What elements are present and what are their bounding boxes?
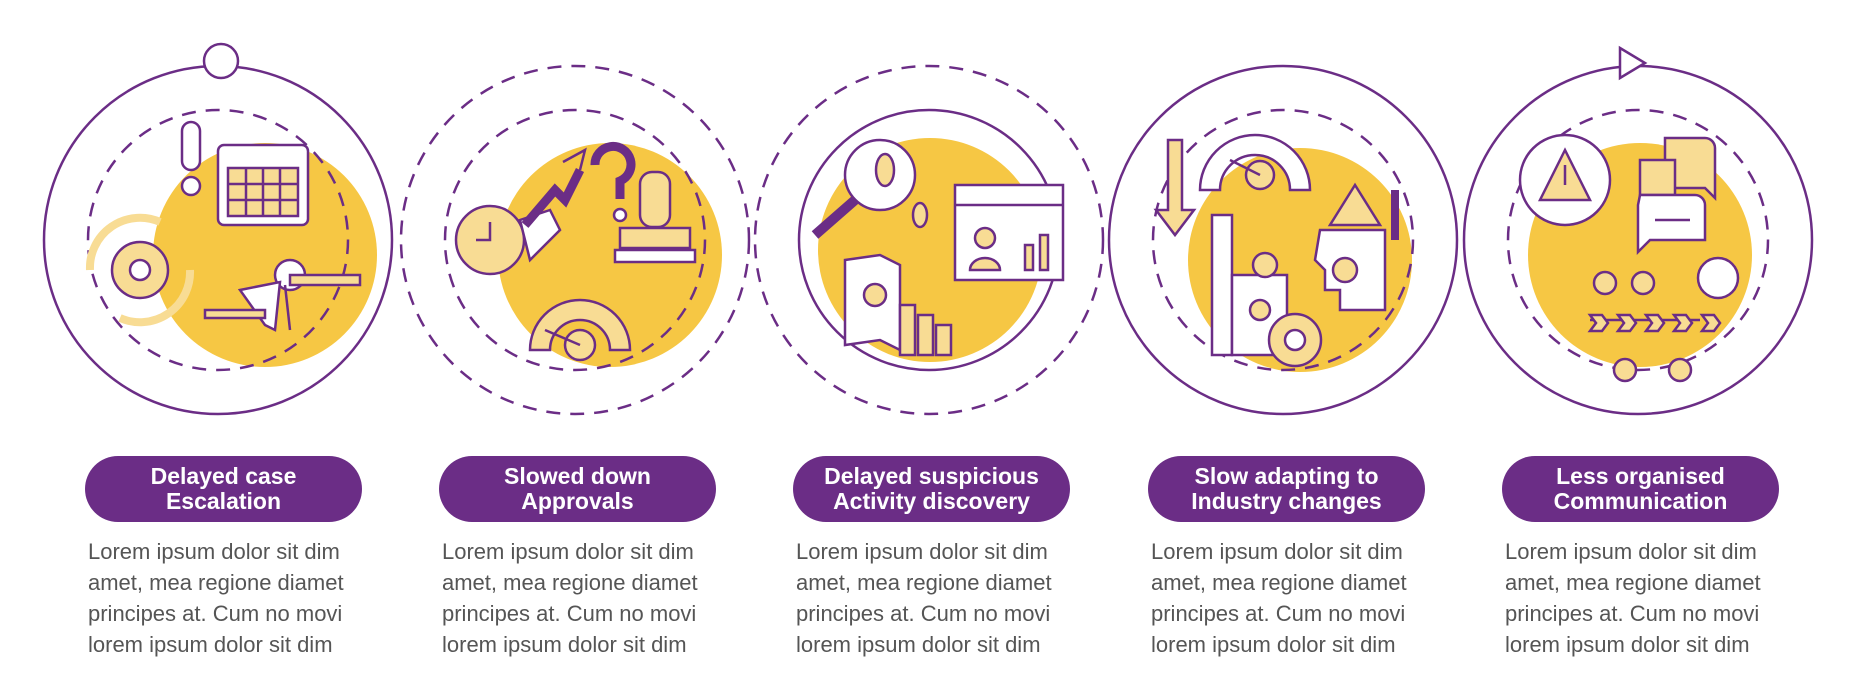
pill: title 2: Slowed down — [504, 463, 651, 489]
icon: gauge 4 — [1200, 135, 1310, 190]
circle 3 — [755, 66, 1103, 414]
text 4: amet, mea regione diamet — [1151, 570, 1407, 595]
icon: gear warning — [1520, 135, 1610, 225]
circle 1 — [44, 44, 392, 414]
circle 2 — [401, 66, 749, 414]
text 3: amet, mea regione diamet — [796, 570, 1052, 595]
text 4: principes at. Cum no movi — [1151, 601, 1405, 626]
text 3: lorem ipsum dolor sit dim — [796, 632, 1041, 657]
pill: title 2 — [439, 456, 716, 522]
icon: chat bubbles — [1638, 138, 1715, 252]
pill: title 5 — [1502, 456, 1779, 522]
circle 5 — [1464, 48, 1812, 414]
icon: stamp — [615, 172, 695, 262]
icon: tired worker — [205, 260, 360, 330]
text 1: lorem ipsum dolor sit dim — [88, 632, 333, 657]
icon: question — [595, 146, 631, 221]
pill: title 3: Activity discovery — [833, 488, 1030, 514]
text 2 — [442, 539, 698, 657]
pill: title 4 — [1148, 456, 1425, 522]
pill: title 3: Delayed suspicious — [824, 463, 1039, 489]
text 3: Lorem ipsum dolor sit dim — [796, 539, 1048, 564]
text 2: amet, mea regione diamet — [442, 570, 698, 595]
text 5: principes at. Cum no movi — [1505, 601, 1759, 626]
text 2: lorem ipsum dolor sit dim — [442, 632, 687, 657]
text 4: Lorem ipsum dolor sit dim — [1151, 539, 1403, 564]
diagram circles — [42, 42, 1814, 416]
text 5: amet, mea regione diamet — [1505, 570, 1761, 595]
icon: timeline — [1590, 258, 1738, 381]
icon: exclamation — [182, 122, 200, 195]
icon: gear cycle — [90, 218, 190, 322]
icon: head with warning — [1315, 185, 1395, 310]
icon: calendar — [218, 145, 308, 225]
text 3 — [796, 539, 1052, 657]
icon: stopwatch hand — [456, 206, 560, 274]
pill: title 1: Escalation — [166, 488, 281, 514]
pill: title 4: Industry changes — [1191, 488, 1382, 514]
pill: title 1 — [85, 456, 362, 522]
text 5: Lorem ipsum dolor sit dim — [1505, 539, 1757, 564]
text 2: principes at. Cum no movi — [442, 601, 696, 626]
text 1: amet, mea regione diamet — [88, 570, 344, 595]
pill: title 4: Slow adapting to — [1194, 463, 1378, 489]
text 4 — [1151, 539, 1407, 657]
text 2: Lorem ipsum dolor sit dim — [442, 539, 694, 564]
text 5 — [1505, 539, 1761, 657]
pill: title 5: Communication — [1554, 488, 1727, 514]
circle 4 — [1109, 66, 1457, 414]
text 1 — [88, 539, 344, 657]
icon: magnifier footprints — [815, 140, 927, 235]
icon: down arrow — [1156, 140, 1194, 235]
text 1: principes at. Cum no movi — [88, 601, 342, 626]
icon: arrow up — [525, 150, 585, 225]
text 3: principes at. Cum no movi — [796, 601, 1050, 626]
text 5: lorem ipsum dolor sit dim — [1505, 632, 1750, 657]
pill: title 5: Less organised — [1556, 463, 1725, 489]
icon: browser chart — [955, 185, 1063, 280]
pill: title 2: Approvals — [521, 488, 634, 514]
icon: map and bars — [845, 255, 951, 355]
pill: title 3 — [793, 456, 1070, 522]
icon: gauge — [530, 300, 630, 360]
text 1: Lorem ipsum dolor sit dim — [88, 539, 340, 564]
icon: factory — [1212, 215, 1321, 366]
text 4: lorem ipsum dolor sit dim — [1151, 632, 1396, 657]
pill: title 1: Delayed case — [151, 463, 296, 489]
